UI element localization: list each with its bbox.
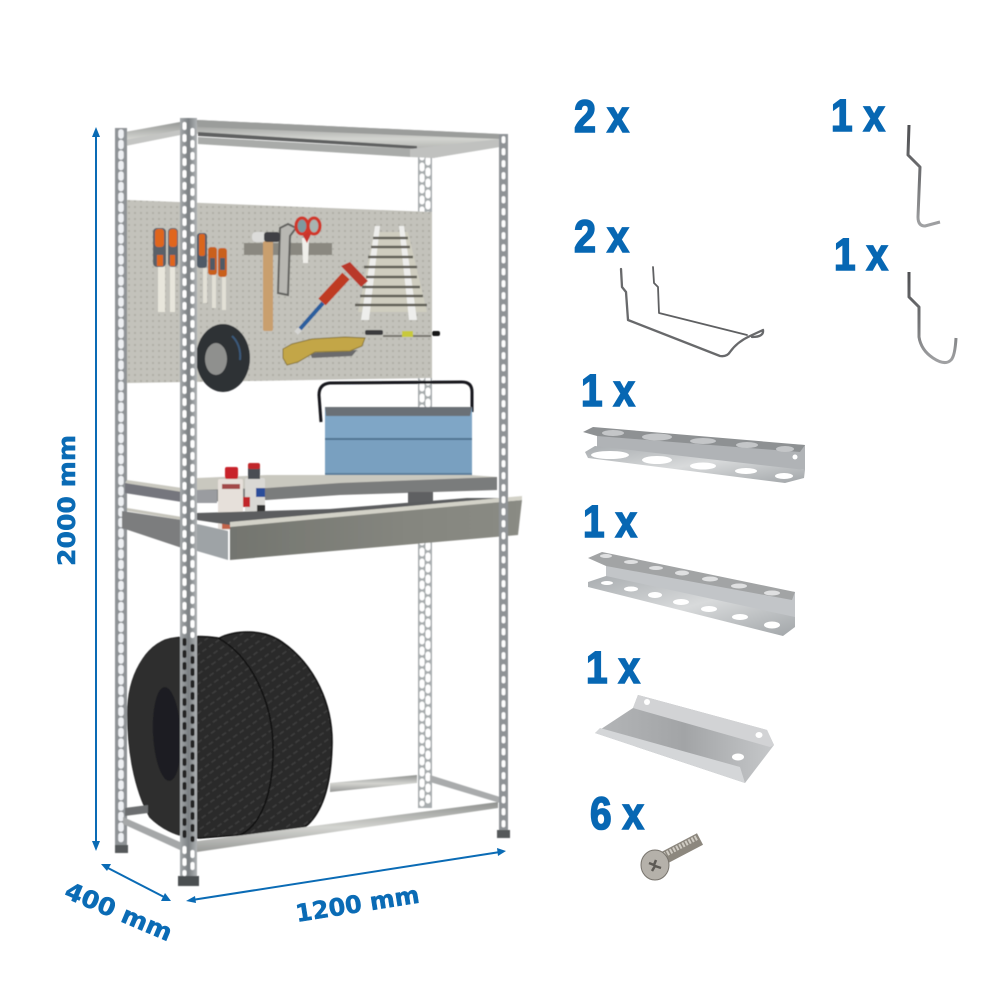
tape roll (196, 324, 250, 392)
toolbox (319, 382, 472, 478)
front tyre (128, 636, 273, 838)
dimension label: 400 mm: 400 mm (61, 877, 177, 947)
scissors (296, 218, 320, 263)
dimension label: 1200 mm: 1200 mm (294, 881, 421, 928)
dimension: width arrow (186, 848, 506, 903)
icon: angled shelf bracket (595, 695, 774, 783)
icon: screw (641, 837, 700, 880)
quantity: 1 x: 1 x (834, 229, 888, 280)
icon: double wire hook (621, 267, 763, 356)
screwdriver pair (153, 228, 178, 312)
dimension: height arrow (92, 127, 100, 851)
quantity: 1 x: 1 x (831, 90, 885, 141)
front left upright (178, 118, 199, 886)
icon: holder bracket large holes (583, 427, 805, 483)
perforated tool panel (127, 200, 440, 392)
screwdriver trio (197, 233, 227, 310)
rear right upright (418, 150, 432, 808)
quantity: 1 x: 1 x (583, 496, 637, 547)
dimension label: 2000 mm: 2000 mm (53, 435, 81, 566)
quantity: 1 x: 1 x (586, 642, 640, 693)
quantity: 1 x: 1 x (581, 365, 635, 416)
spray cans (218, 463, 265, 530)
top shelf (125, 120, 500, 158)
bottom shelf frame (123, 775, 500, 853)
icon: holder bracket small holes (588, 552, 795, 636)
quantity: 6 x: 6 x (590, 788, 644, 839)
dimension: depth arrow (101, 864, 171, 901)
quantity: 2 x: 2 x (574, 91, 629, 142)
drawer (197, 496, 522, 560)
rear tyre (216, 632, 332, 836)
work gloves (283, 337, 365, 365)
quantity: 2 x hooks: 2 x (574, 211, 629, 262)
hammer (252, 232, 280, 331)
red mallet tool (296, 262, 368, 333)
middle shelf (122, 475, 497, 548)
right upright (497, 134, 510, 838)
horizontal screwdriver (365, 330, 440, 337)
icon: wire hook short (908, 125, 940, 226)
shelving unit with tools (115, 118, 522, 886)
wrench set (355, 226, 427, 320)
icon: wire hook curved (909, 272, 956, 363)
rear left upright (115, 128, 128, 853)
pliers (278, 224, 296, 295)
rail (244, 243, 332, 255)
